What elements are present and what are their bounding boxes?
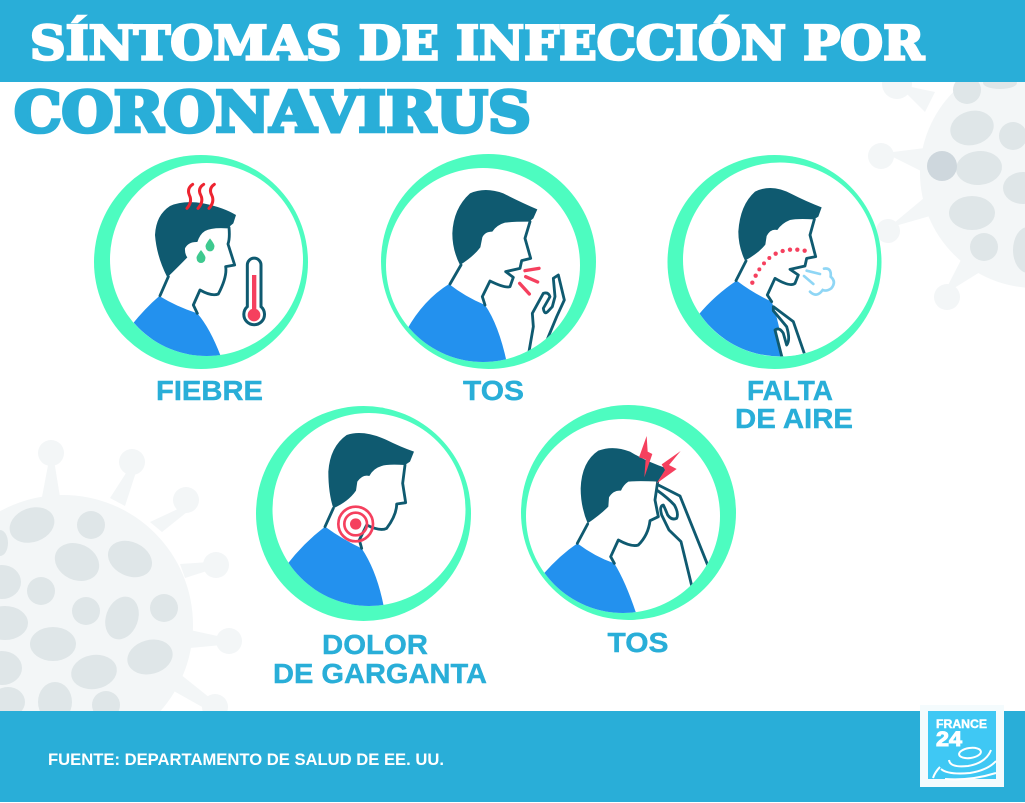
title line 1: SÍNTOMAS DE INFECCIÓN POR [30, 16, 925, 72]
label: falta de aire: DE AIRE [735, 403, 853, 434]
panel: dolor de cabeza [521, 405, 736, 620]
label: dolor de garganta: DE GARGANTA [273, 658, 487, 689]
illustration: man coughing [405, 190, 564, 373]
title line 2: CORONAVIRUS [14, 80, 531, 146]
icon: pain target [338, 507, 373, 541]
header band [0, 0, 1025, 82]
background virus top right [868, 58, 1025, 310]
icon: sweat drops [197, 238, 214, 263]
label: tos: TOS [463, 375, 524, 406]
logo: France 24 [920, 705, 1004, 787]
icon: airway dots [750, 247, 807, 285]
logo: France 24: 24 [936, 728, 962, 751]
logo: France 24: FRANCE [936, 717, 987, 731]
icon: lightning bolts [639, 436, 681, 483]
illustration: man short of breath [693, 188, 834, 367]
label: tos second: TOS [608, 627, 668, 658]
icon: cough lines [520, 268, 539, 294]
footer band [0, 711, 1025, 802]
label: dolor de garganta [273, 629, 487, 689]
background virus bottom left [0, 440, 242, 755]
icon: heat waves [187, 184, 214, 208]
illustration: man with headache [538, 436, 709, 620]
label: fiebre: FIEBRE [156, 375, 263, 406]
icon: breath cloud [804, 268, 834, 295]
panel: dolor de garganta [256, 406, 471, 621]
icon: thermometer [244, 258, 264, 325]
label: dolor de garganta: DOLOR [322, 629, 428, 660]
label: falta de aire: FALTA [747, 375, 833, 406]
illustration: man with sore throat [288, 433, 414, 606]
illustration: man with fever [134, 182, 266, 356]
panel: falta de aire [668, 155, 882, 369]
panel: fiebre [94, 155, 308, 370]
source note: FUENTE: DEPARTAMENTO DE SALUD DE EE. UU. [48, 751, 444, 769]
panel: tos [381, 154, 596, 373]
label: falta de aire [735, 375, 853, 434]
